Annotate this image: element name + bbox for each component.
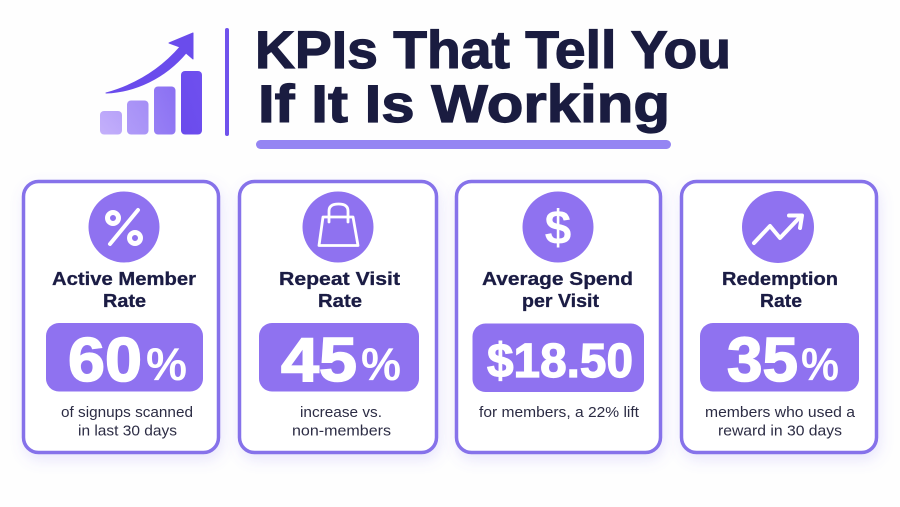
heading: Repeat Visit: [279, 268, 400, 289]
description: non-members: [292, 422, 391, 440]
description: [292, 404, 391, 440]
heading: Rate: [103, 290, 146, 311]
panel: Average Spend per Visit: [456, 182, 660, 452]
description: [61, 404, 193, 440]
value pill: [259, 323, 419, 395]
value pill: $18.50: [487, 335, 633, 388]
value pill: %: [361, 338, 401, 390]
value pill: 35: [727, 326, 798, 395]
value pill: %: [146, 338, 187, 390]
title underline: [256, 140, 671, 149]
divider bar: [225, 28, 229, 136]
description: reward in 30 days: [718, 422, 842, 440]
icon: dollar: [522, 192, 594, 262]
icon: dollar: $: [545, 202, 572, 255]
icon: shopping bag: [302, 192, 374, 262]
value pill: [700, 323, 859, 395]
title: [255, 21, 731, 134]
value pill: 60: [68, 326, 142, 395]
heading: Average Spend: [482, 268, 633, 289]
panel: Repeat Visit Rate: [240, 182, 436, 452]
heading: [279, 268, 400, 311]
icon: trend arrow: [742, 191, 814, 263]
description: of signups scanned: [61, 404, 193, 421]
heading: [722, 268, 838, 311]
heading: Redemption: [722, 268, 838, 289]
value pill: 45: [281, 326, 357, 395]
title: KPIs That Tell You: [255, 21, 731, 80]
heading: [482, 268, 633, 311]
panel: Redemption Rate: [682, 182, 876, 452]
description: members who used a: [705, 404, 856, 421]
heading: [52, 268, 196, 311]
panel: Active Member Rate: [24, 182, 218, 452]
heading: per Visit: [522, 290, 599, 311]
icon: rising bar chart with arrow: [100, 33, 202, 134]
title: If It Is Working: [258, 75, 670, 134]
heading: Rate: [760, 290, 802, 311]
heading: Active Member: [52, 268, 196, 289]
description: [705, 404, 856, 440]
value pill: [46, 323, 203, 395]
value pill: %: [801, 338, 839, 390]
value pill: [472, 324, 644, 392]
description: in last 30 days: [78, 422, 177, 440]
description: increase vs.: [300, 404, 382, 421]
icon: percent: [88, 192, 160, 262]
description: for members, a 22% lift: [479, 404, 640, 421]
heading: Rate: [318, 290, 362, 311]
